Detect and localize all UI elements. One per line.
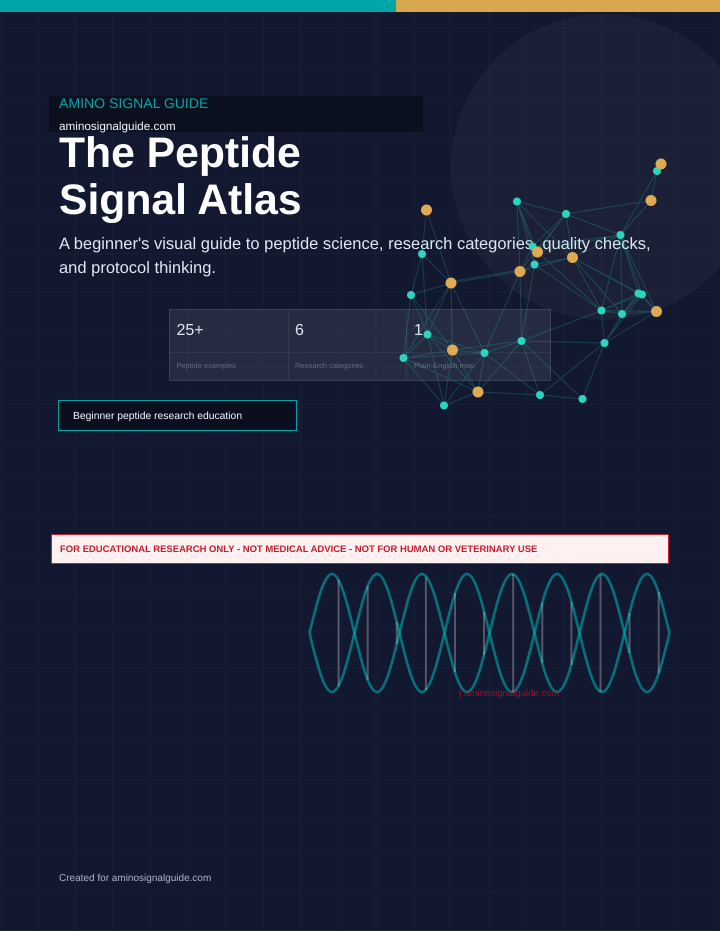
- helix strand two: [310, 574, 670, 692]
- subtitle: [59, 234, 651, 277]
- network teal nodes: [400, 167, 661, 410]
- panel: stats: [169, 309, 551, 381]
- title: Signal Atlas: [59, 176, 302, 224]
- stat: peptide examples label: Peptide examples: [176, 361, 236, 370]
- badge: Beginner peptide research education: [73, 410, 242, 422]
- stat divider line: [170, 352, 550, 353]
- top bar: teal segment: [0, 0, 396, 12]
- network gold nodes: [421, 158, 666, 398]
- brand domain: aminosignalguide.com: [59, 120, 176, 133]
- subtitle: A beginner's visual guide to peptide science, research categories, quality checks,: [59, 234, 651, 253]
- subtitle: and protocol thinking.: [59, 258, 216, 277]
- decorative background circle: [451, 14, 720, 320]
- header band: [49, 96, 423, 132]
- domain watermark: | aminosignalguide.com: [459, 688, 560, 699]
- stat column divider one: [288, 310, 289, 380]
- stat: peptide examples value: 25+: [176, 322, 204, 339]
- footer credit: Created for aminosignalguide.com: [59, 873, 211, 884]
- network edges: [404, 164, 661, 406]
- stat: plain-english map value: 1: [414, 322, 423, 339]
- title: [59, 129, 302, 224]
- brand eyebrow: AMINO SIGNAL GUIDE: [59, 95, 208, 111]
- warning banner: FOR EDUCATIONAL RESEARCH ONLY - NOT MEDICAL ADVICE - NOT FOR HUMAN OR VETERINARY USE: [60, 544, 537, 555]
- stat: plain-english map label: Plain-English map: [414, 361, 474, 370]
- helix strand one: [310, 574, 670, 692]
- badge: [58, 400, 297, 430]
- stat: research categories label: Research categories: [295, 361, 364, 370]
- warning banner: [51, 534, 669, 564]
- title: The Peptide: [59, 129, 301, 177]
- helix rungs: [339, 574, 659, 692]
- top bar: gold segment: [396, 0, 720, 12]
- stat: research categories value: 6: [295, 322, 304, 339]
- stat column divider two: [406, 310, 407, 380]
